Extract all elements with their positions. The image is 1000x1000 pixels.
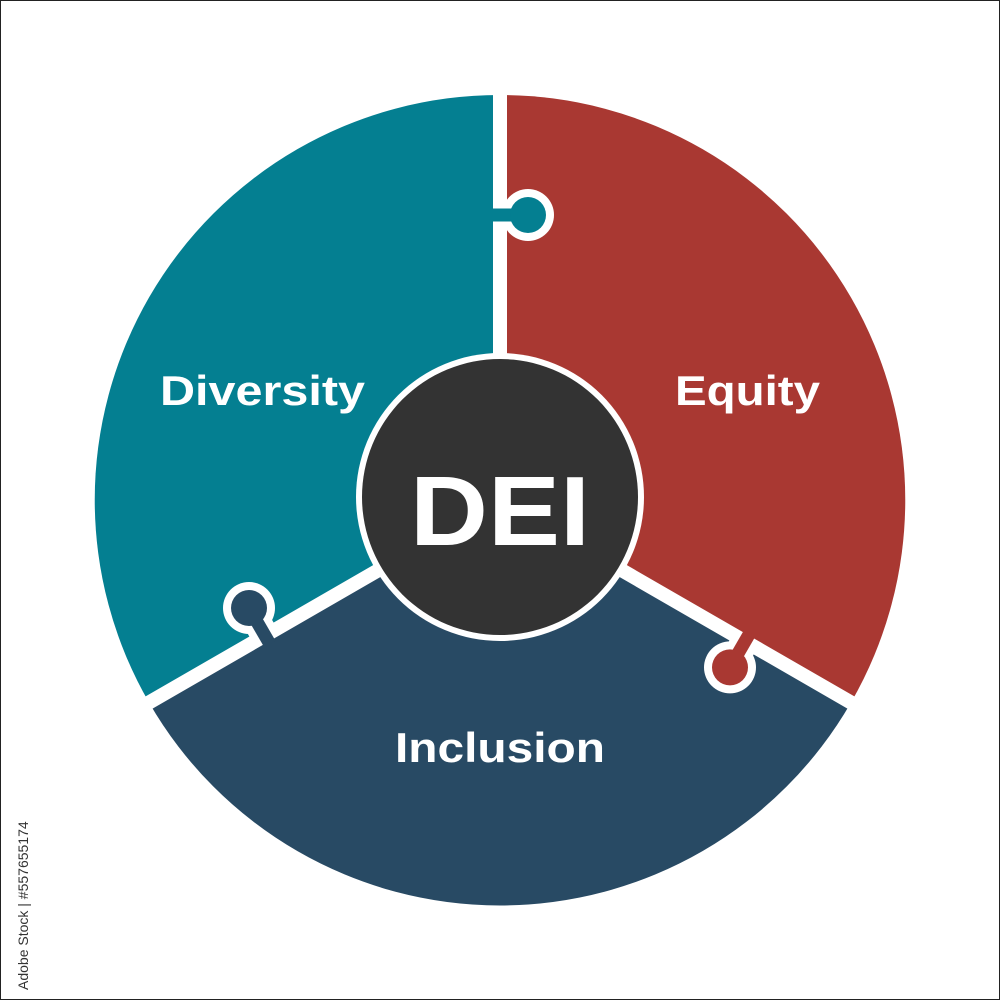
label: Inclusion: Inclusion xyxy=(395,724,605,771)
label: Diversity: Diversity xyxy=(160,367,366,414)
label: Equity: Equity xyxy=(675,367,821,414)
icon: puzzle tab inclusion-diversity xyxy=(223,582,275,644)
icon: puzzle tab equity-inclusion xyxy=(704,633,756,693)
center circle: DEI: DEI xyxy=(410,456,590,566)
panel: diversity segment xyxy=(95,95,500,702)
icon: puzzle tab diversity-equity xyxy=(490,189,554,241)
center circle: DEI xyxy=(356,353,644,641)
credit text: Adobe Stock | #557655174 xyxy=(15,821,31,990)
panel: equity segment xyxy=(500,95,905,702)
panel: inclusion segment xyxy=(149,500,851,905)
divider lines xyxy=(143,88,857,706)
